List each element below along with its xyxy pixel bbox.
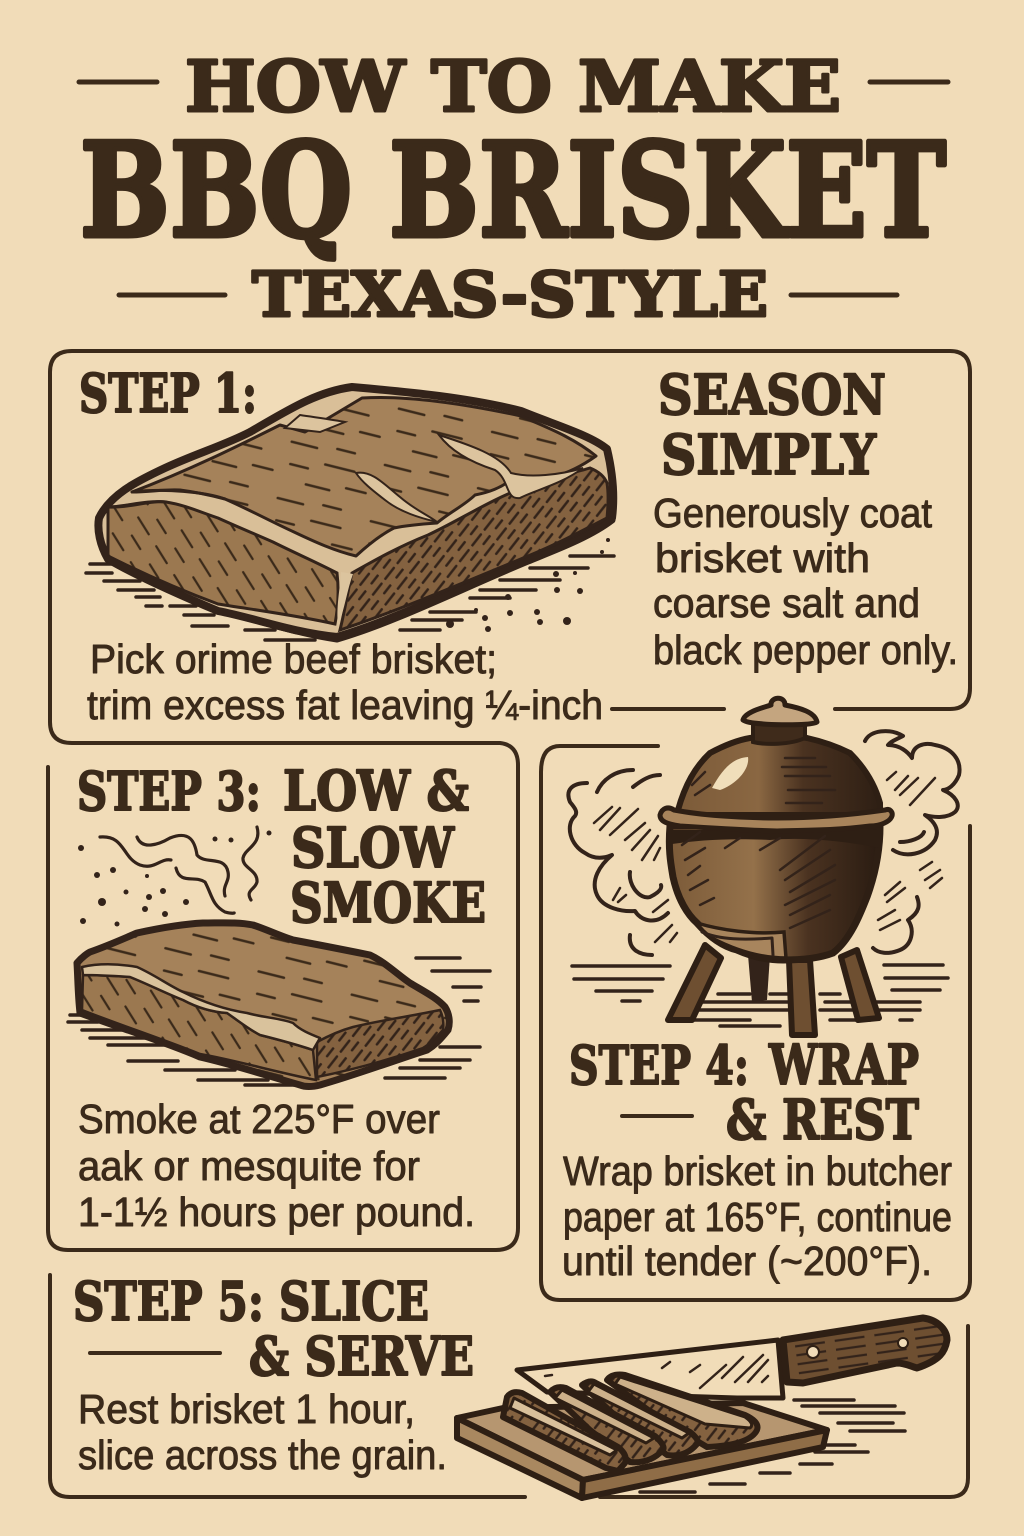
heading: step 1: STEP 1: xyxy=(79,363,257,425)
panel: step 1 season simply: brisket with xyxy=(655,535,870,581)
panel: step 3 low and slow smoke: SLOW xyxy=(291,815,455,880)
subtitle: texas-style: TEXAS-STYLE xyxy=(252,258,768,331)
icon: raw brisket xyxy=(86,387,614,640)
heading: low and slow smoke: LOW & xyxy=(283,758,469,823)
icon: smoked brisket xyxy=(68,923,490,1086)
heading: step 4: STEP 4: xyxy=(569,1035,749,1097)
panel: step 1 frame xyxy=(48,351,970,1250)
knob xyxy=(753,720,805,744)
knife blade xyxy=(517,1340,783,1398)
brisket slices xyxy=(607,1375,758,1447)
text: smoking instructions: Smoke at 225°F over xyxy=(78,1096,440,1142)
panel: step 4 wrap and rest xyxy=(562,698,960,1284)
panel: step 5 frame xyxy=(50,1275,968,1497)
icon: smoke wisps and specks xyxy=(78,827,272,926)
panel: step 1 season simply: SIMPLY xyxy=(661,422,877,487)
pepper specks xyxy=(446,538,610,632)
smoke cloud right xyxy=(865,731,960,953)
text: wrapping instructions: Wrap brisket in butcher xyxy=(563,1148,952,1194)
panel: step 4 frame xyxy=(541,746,970,1300)
panel: step 3 low and slow smoke xyxy=(68,758,490,1235)
panel: step 1 season simply xyxy=(79,362,958,728)
panel: step 4 wrap and rest: paper at 165°F, continue xyxy=(563,1194,952,1240)
text: trimming instructions: Pick orime beef brisket; xyxy=(90,636,497,682)
lid rim xyxy=(660,808,892,831)
panel: step 4 wrap and rest: until tender (~200°F). xyxy=(562,1238,932,1284)
panel: step 3 low and slow smoke: aak or mesquite for xyxy=(78,1143,420,1189)
text: seasoning instructions: Generously coat xyxy=(653,490,933,536)
text: slicing instructions: Rest brisket 1 hour, xyxy=(78,1386,415,1432)
panel: step 4 wrap and rest: & REST xyxy=(726,1087,919,1152)
board xyxy=(457,1403,827,1480)
panel: step 3 low and slow smoke: 1-1½ hours per pound. xyxy=(78,1189,475,1235)
title block xyxy=(79,45,948,331)
bowl xyxy=(669,826,880,960)
dome lid xyxy=(678,736,880,815)
heading: wrap and rest: WRAP xyxy=(768,1032,919,1097)
ground lines xyxy=(572,965,948,1026)
panel: step 1 season simply: black pepper only. xyxy=(653,627,958,673)
heading: and serve: & SERVE xyxy=(249,1326,474,1388)
heading: step 5 slice: STEP 5: SLICE xyxy=(73,1271,429,1333)
panel: step 1 season simply: coarse salt and xyxy=(653,580,920,626)
heading: step 3: STEP 3: xyxy=(77,761,261,823)
smoke cloud left xyxy=(568,770,668,955)
panel: step 5 slice and serve xyxy=(73,1271,947,1498)
panel: step 5 slice and serve: slice across the grain. xyxy=(78,1432,447,1478)
heading: season simply: SEASON xyxy=(658,362,886,427)
panel: step 3 low and slow smoke: SMOKE xyxy=(290,870,486,935)
panel: step 1 season simply: trim excess fat leaving ¼-inch xyxy=(87,682,603,728)
icon: smoker grill xyxy=(568,698,960,1035)
legs xyxy=(748,955,770,1002)
icon: knife and sliced brisket on board xyxy=(457,1318,947,1498)
knife handle xyxy=(783,1318,947,1383)
title line: how to make: HOW TO MAKE xyxy=(185,45,841,128)
